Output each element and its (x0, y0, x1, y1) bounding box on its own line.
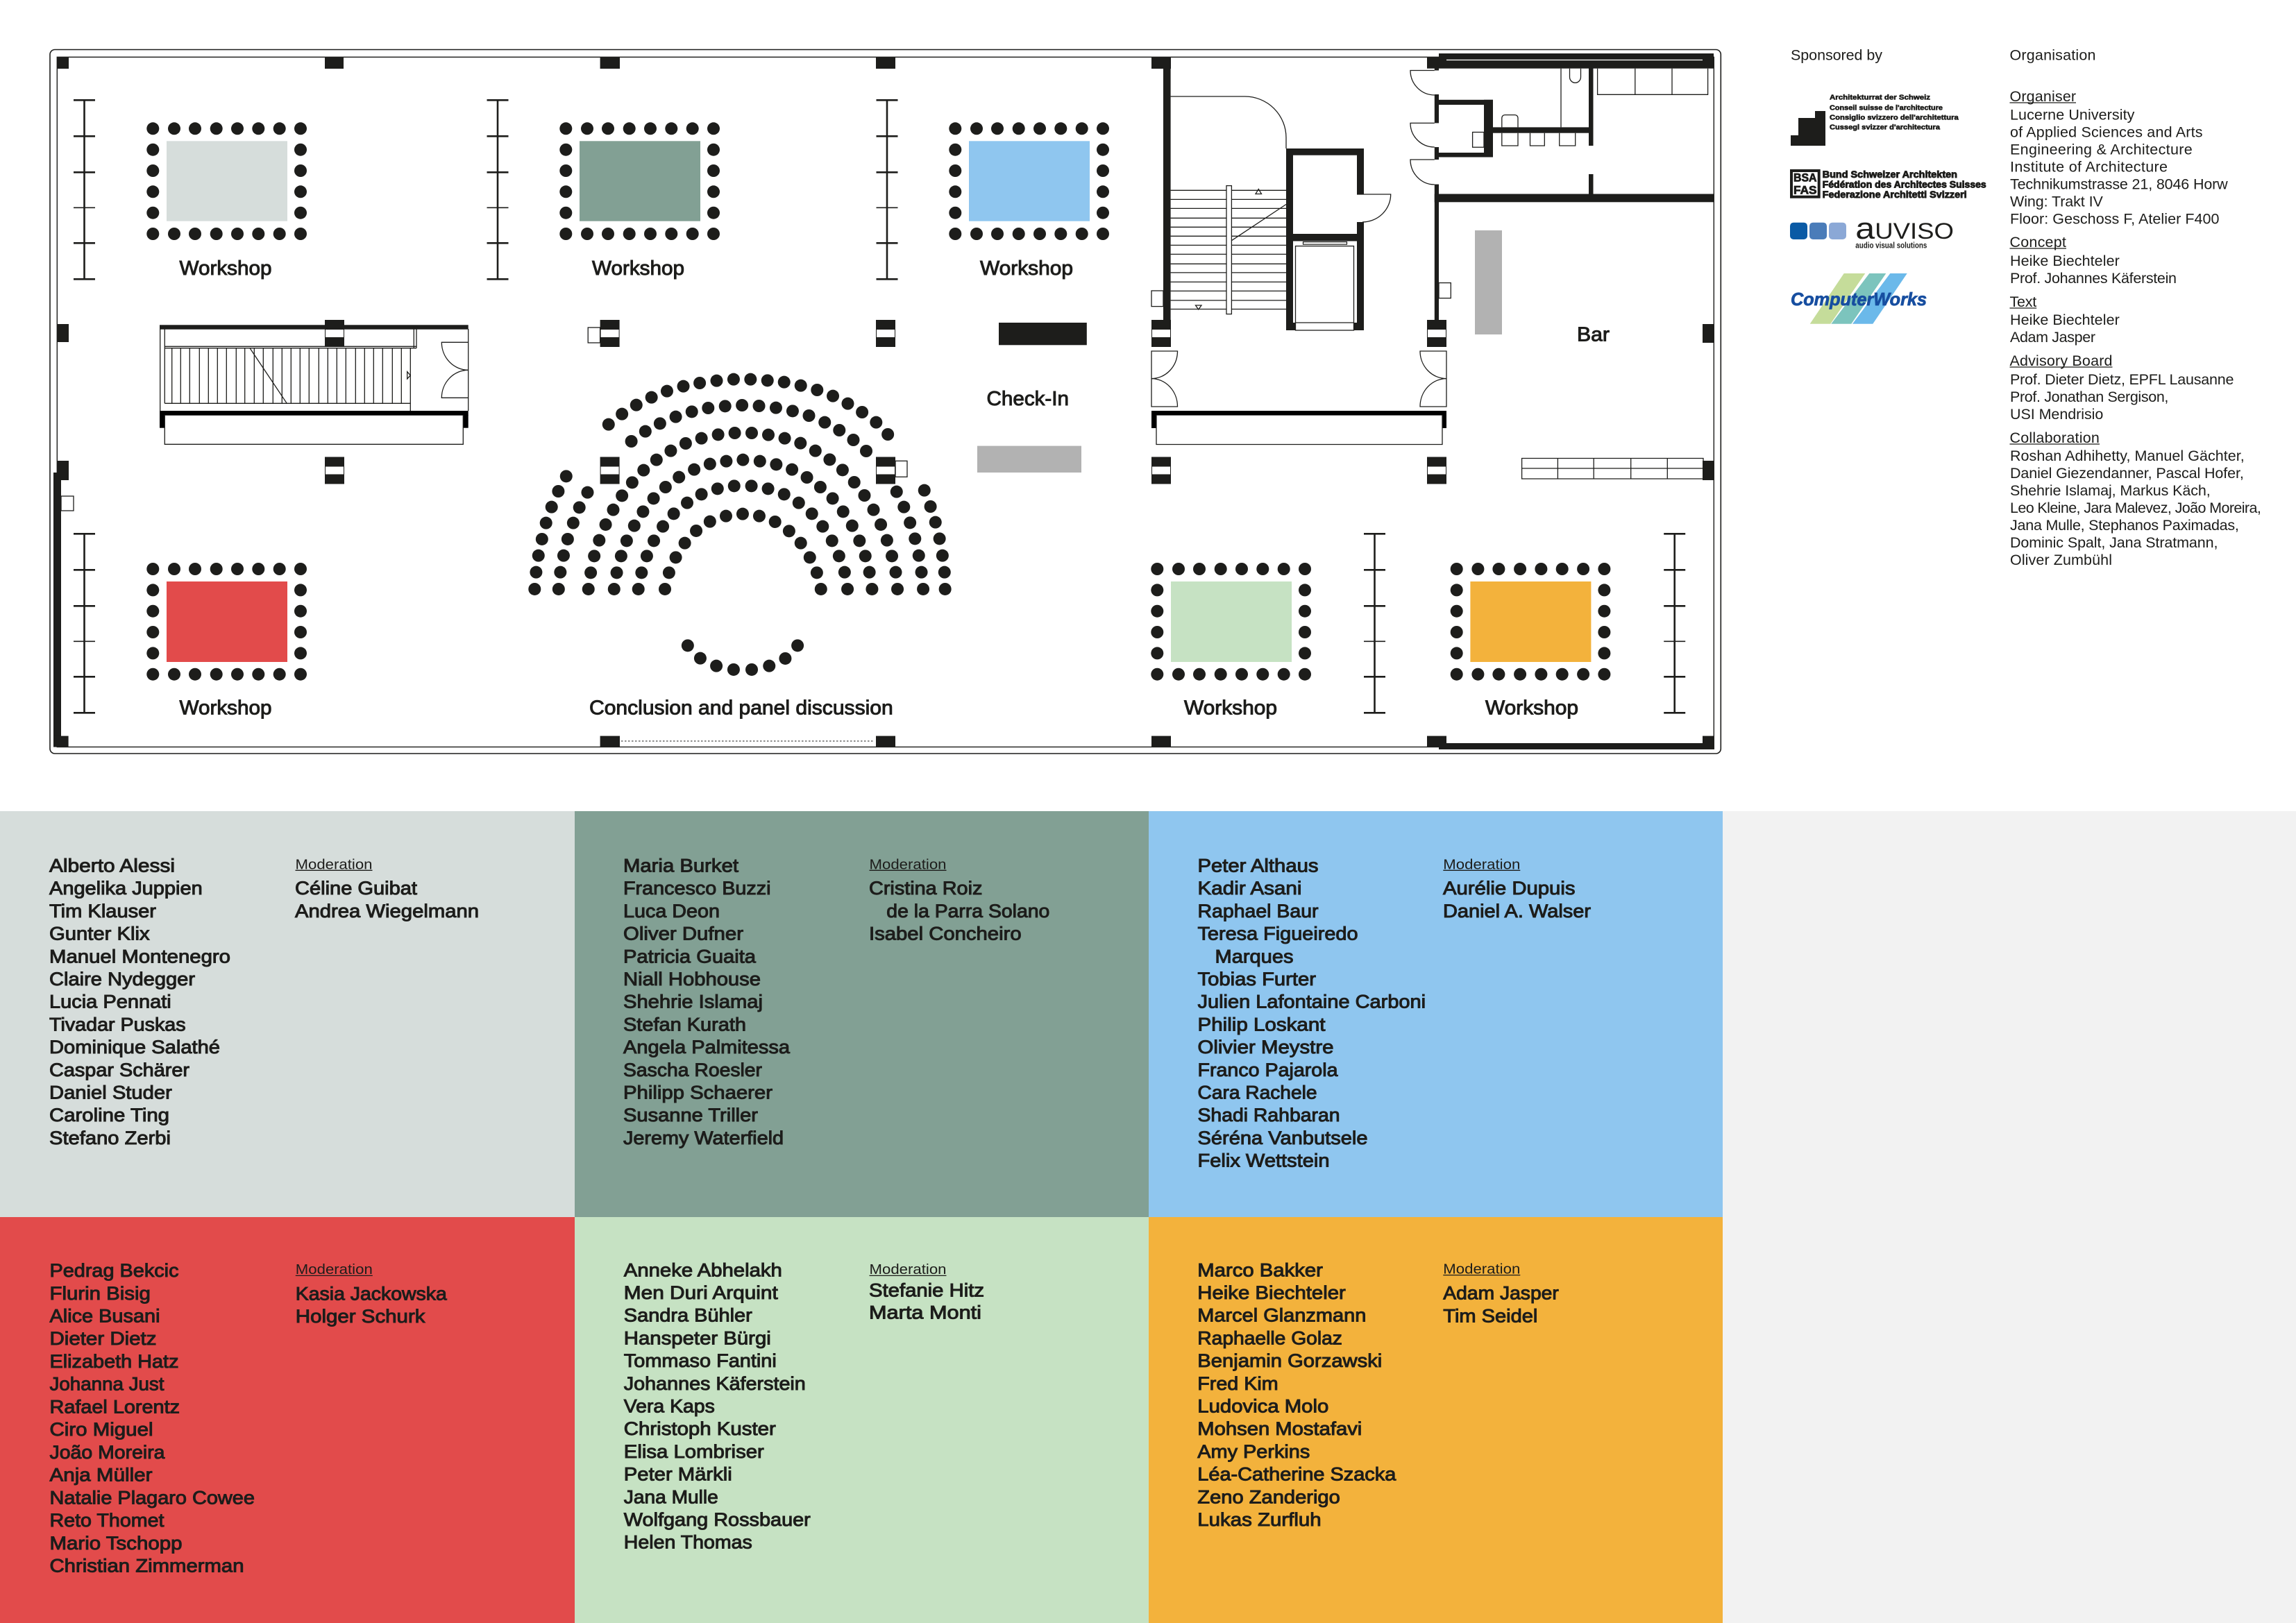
moderation: Moderation (1443, 1261, 1520, 1277)
workshop: orange: Workshop (1485, 697, 1578, 719)
participants: Ciro Miguel (50, 1419, 153, 1440)
workshop: sage: Workshop (592, 257, 684, 280)
participants: Luca Deon (623, 901, 720, 921)
logo: BSA FAS: BSA (1793, 172, 1817, 185)
participants: Vera Kaps (624, 1396, 715, 1417)
logo: auviso: audio visual solutions (1855, 242, 1927, 250)
moderation: Tim Seidel (1443, 1306, 1537, 1327)
participants: Benjamin Gorzawski (1197, 1350, 1382, 1371)
participants: Jeremy Waterfield (623, 1128, 784, 1148)
mid columns (325, 320, 1446, 484)
logo: ComputerWorks: ComputerWorks (1791, 289, 1927, 309)
block: organiser: Wing: Trakt IV (2010, 193, 2103, 210)
block: collaboration (2010, 430, 2261, 568)
heading: organisation: Organisation (2010, 47, 2096, 64)
moderation (869, 856, 1049, 944)
participants: Christoph Kuster (624, 1418, 776, 1439)
panel: sage workshop (575, 811, 1149, 1217)
participants: Stefan Kurath (623, 1014, 746, 1035)
moderation: Aurélie Dupuis (1443, 878, 1576, 899)
building outline (50, 50, 1721, 754)
moderation: Daniel A. Walser (1443, 901, 1591, 921)
workshop: red: Workshop (179, 697, 272, 719)
block: advisory board: USI Mendrisio (2010, 406, 2103, 423)
dashed line between columns (621, 740, 875, 742)
participants: Angela Palmitessa (623, 1037, 790, 1057)
participants: Susanne Triller (623, 1105, 758, 1125)
workshop: blue (876, 100, 1109, 280)
participants (1198, 855, 1426, 1171)
empty light panel (1723, 811, 2296, 1623)
block: text: Adam Jasper (2010, 329, 2095, 346)
block: collaboration: Roshan Adhihetty, Manuel Gächter, (2010, 448, 2245, 464)
participants: Alberto Alessi (49, 855, 175, 876)
participants: Tim Klauser (49, 901, 156, 921)
logo: Architekturrat der Schweiz: Conseil suisse de l'architecture (1830, 103, 1943, 112)
block: concept (2010, 234, 2177, 287)
block: collaboration: Collaboration (2010, 430, 2100, 446)
logo: BSA FAS: Fédération des Architectes Suisses (1823, 179, 1986, 190)
block: collaboration: Shehrie Islamaj, Markus Käch, (2010, 482, 2211, 499)
workshop: orange (1451, 534, 1685, 719)
participants: Cara Rachele (1198, 1082, 1317, 1103)
participants: Peter Märkli (624, 1464, 732, 1485)
moderation: Holger Schurk (296, 1306, 425, 1327)
participants: Shadi Rahbaran (1198, 1105, 1340, 1125)
workshop: blue: Workshop (980, 257, 1073, 280)
participants: Fred Kim (1197, 1373, 1278, 1394)
participants: Jana Mulle (624, 1486, 718, 1507)
block: collaboration: Dominic Spalt, Jana Stratmann, (2010, 534, 2218, 551)
participants (1197, 1259, 1396, 1530)
participants: Anneke Abhelakh (624, 1259, 782, 1280)
participants: Flurin Bisig (50, 1283, 151, 1304)
participants: Alice Busani (50, 1306, 160, 1327)
logo: auviso (1790, 212, 1954, 250)
logo: ComputerWorks (1791, 273, 1927, 324)
moderation: Moderation (296, 856, 372, 873)
workshop: light green: Workshop (1184, 697, 1277, 719)
participants: Kadir Asani (1198, 878, 1302, 899)
logo: Architekturrat der Schweiz: Consiglio svizzero dell'architettura (1830, 113, 1959, 121)
washrooms and service rooms (1410, 68, 1714, 202)
participants: Franco Pajarola (1198, 1060, 1338, 1080)
block: text: Heike Biechteler (2010, 312, 2120, 328)
logo: Architekturrat der Schweiz (1791, 93, 1959, 146)
participants: Hanspeter Bürgi (624, 1327, 771, 1348)
moderation: Céline Guibat (295, 878, 418, 899)
participants: Anja Müller (50, 1465, 153, 1486)
block: organiser: Institute of Architecture (2010, 158, 2168, 175)
participants (49, 855, 230, 1148)
participants: Francesco Buzzi (623, 878, 770, 899)
block: organiser: of Applied Sciences and Arts (2010, 124, 2203, 140)
block: concept: Heike Biechteler (2010, 253, 2120, 269)
logo: BSA FAS: FAS (1793, 184, 1817, 196)
logo: Architekturrat der Schweiz: Architekturrat der Schweiz (1830, 93, 1930, 101)
moderation: Adam Jasper (1443, 1283, 1559, 1304)
participants: Angelika Juppien (49, 878, 203, 899)
label: Check-In: Check-In (987, 388, 1069, 410)
block: organiser: Organiser (2010, 88, 2076, 105)
organisation column (2010, 47, 2261, 568)
panel: blue workshop (1149, 811, 1723, 1217)
participants: Lucia Pennati (49, 992, 171, 1012)
participants: Patricia Guaita (623, 946, 756, 967)
moderation (869, 1261, 984, 1323)
participants: Teresa Figueiredo (1198, 924, 1358, 944)
participants: Ludovica Molo (1197, 1396, 1328, 1417)
participants: Dieter Dietz (50, 1328, 157, 1349)
participants: Marques (1215, 946, 1294, 967)
west staircase (160, 320, 469, 444)
label: Bar: Bar (1577, 323, 1610, 346)
participants: Christian Zimmerman (50, 1556, 244, 1577)
participants: Dominique Salathé (49, 1037, 220, 1057)
participants: Claire Nydegger (49, 969, 195, 989)
moderation: Moderation (869, 856, 947, 873)
participants: Raphaelle Golaz (1197, 1327, 1342, 1348)
participants: Manuel Montenegro (49, 946, 230, 967)
participants: Philipp Schaerer (623, 1082, 773, 1103)
workshop: grey (74, 100, 307, 280)
moderation: Andrea Wiegelmann (295, 901, 479, 921)
central staircase and lift core (1151, 96, 1446, 444)
moderation (1443, 1261, 1559, 1327)
block: advisory board: Prof. Dieter Dietz, EPFL Lausanne (2010, 371, 2234, 388)
participants: Wolfgang Rossbauer (624, 1509, 811, 1530)
participants: Helen Thomas (624, 1532, 752, 1553)
moderation: Moderation (1443, 856, 1520, 873)
moderation: Moderation (296, 1261, 373, 1277)
block: organiser: Lucerne University (2010, 106, 2135, 123)
block: text: Text (2010, 294, 2036, 310)
block: collaboration: Jana Mulle, Stephanos Paximadas, (2010, 517, 2239, 534)
participants: Marcel Glanzmann (1197, 1305, 1366, 1326)
label: conclusion and panel discussion: Conclusion and panel discussion (589, 697, 893, 719)
panel discussion seats (682, 639, 804, 676)
block: organiser (2010, 88, 2228, 227)
logo: BSA FAS: Bund Schweizer Architekten (1823, 169, 1957, 180)
participants: Amy Perkins (1197, 1441, 1310, 1462)
block: concept: Prof. Johannes Käferstein (2010, 270, 2177, 287)
participants: Rafael Lorentz (50, 1396, 180, 1417)
participants: Lukas Zurfluh (1197, 1509, 1322, 1530)
logo: BSA FAS: Federazione Architetti Svizzeri (1823, 189, 1967, 200)
participants: Men Duri Arquint (624, 1282, 779, 1303)
block: concept: Concept (2010, 234, 2066, 250)
block: advisory board: Advisory Board (2010, 352, 2113, 369)
participants: Heike Biechteler (1197, 1282, 1346, 1303)
workshop: sage (487, 100, 720, 280)
floor plan (50, 50, 1721, 754)
block: advisory board: Prof. Jonathan Sergison, (2010, 389, 2168, 405)
participants: Caroline Ting (49, 1105, 169, 1125)
participants: Mario Tschopp (50, 1533, 182, 1554)
participants: Shehrie Islamaj (623, 992, 763, 1012)
participants: Oliver Dufner (623, 924, 743, 944)
participants: Pedrag Bekcic (50, 1260, 179, 1281)
panel: grey workshop (0, 811, 575, 1217)
moderation: Moderation (869, 1261, 947, 1277)
participants: Natalie Plagaro Cowee (50, 1487, 255, 1508)
moderation: Marta Monti (869, 1302, 981, 1323)
participants: Tivadar Puskas (49, 1014, 186, 1035)
participants: Léa-Catherine Szacka (1197, 1464, 1396, 1485)
check-in table (977, 446, 1081, 473)
participants (623, 855, 790, 1148)
block: collaboration: Oliver Zumbühl (2010, 552, 2112, 568)
moderation (295, 856, 479, 921)
participants: Tommaso Fantini (624, 1350, 777, 1371)
participants (50, 1260, 255, 1577)
moderation: de la Parra Solano (886, 901, 1049, 921)
participants: Mohsen Mostafavi (1197, 1418, 1362, 1439)
participants: Maria Burket (623, 855, 739, 876)
panel: light green workshop (575, 1217, 1149, 1623)
participants: Peter Althaus (1198, 855, 1319, 876)
panel: red workshop (0, 1217, 575, 1623)
small radiators (61, 283, 1451, 511)
participants: Caspar Schärer (49, 1060, 189, 1080)
participants: Johannes Käferstein (624, 1373, 806, 1394)
workshop: light green (1151, 534, 1385, 719)
participants: Séréna Vanbutsele (1198, 1128, 1367, 1148)
participants: Stefano Zerbi (49, 1128, 171, 1148)
participants (624, 1259, 811, 1553)
block: advisory board (2010, 352, 2234, 423)
block: organiser: Engineering & Architecture (2010, 141, 2193, 158)
moderation: Isabel Concheiro (869, 924, 1022, 944)
moderation: Cristina Roiz (869, 878, 982, 899)
moderation: Kasia Jackowska (296, 1283, 447, 1304)
block: organiser: Floor: Geschoss F, Atelier F400 (2010, 210, 2220, 227)
workshop: red (74, 534, 307, 719)
block: organiser: Technikumstrasse 21, 8046 Horw (2010, 176, 2228, 192)
participants: Sandra Bühler (624, 1305, 752, 1326)
moderation (1443, 856, 1591, 921)
participants: Reto Thomet (50, 1510, 164, 1531)
structural columns and walls (53, 53, 1714, 749)
block: text (2010, 294, 2120, 346)
auditorium seating (528, 373, 952, 595)
participants: Elizabeth Hatz (50, 1351, 179, 1372)
participants: Olivier Meystre (1198, 1037, 1334, 1057)
check-in desk (999, 323, 1087, 345)
heading: sponsored by: Sponsored by (1791, 47, 1882, 64)
participants: Tobias Furter (1198, 969, 1316, 989)
panel: orange workshop (1149, 1217, 1723, 1623)
participants: Sascha Roesler (623, 1060, 762, 1080)
moderation: Stefanie Hitz (869, 1280, 984, 1300)
participants: Zeno Zanderigo (1197, 1486, 1340, 1507)
participants: Elisa Lombriser (624, 1441, 764, 1462)
participants: Marco Bakker (1197, 1259, 1323, 1280)
participants: Daniel Studer (49, 1082, 172, 1103)
moderation (296, 1261, 447, 1327)
participants: Niall Hobhouse (623, 969, 761, 989)
participants: João Moreira (50, 1442, 165, 1463)
participants: Johanna Just (50, 1374, 164, 1395)
participants: Raphael Baur (1198, 901, 1319, 921)
logo: Architekturrat der Schweiz: Cussegl svizzer d'architectura (1830, 124, 1940, 132)
participants: Philip Loskant (1198, 1014, 1326, 1035)
bar shelf (1522, 458, 1703, 479)
participants: Julien Lafontaine Carboni (1198, 992, 1426, 1012)
logo: auviso: aUVISO (1855, 212, 1954, 246)
participants: Felix Wettstein (1198, 1150, 1330, 1171)
logo: BSA FAS (1791, 169, 1986, 200)
block: collaboration: Daniel Giezendanner, Pascal Hofer, (2010, 465, 2244, 482)
bar counter (1475, 230, 1502, 334)
participants: Gunter Klix (49, 924, 150, 944)
sponsors column (1790, 47, 1986, 324)
workshop: grey: Workshop (179, 257, 272, 280)
block: collaboration: Leo Kleine, Jara Malevez, João Moreira, (2010, 500, 2261, 516)
